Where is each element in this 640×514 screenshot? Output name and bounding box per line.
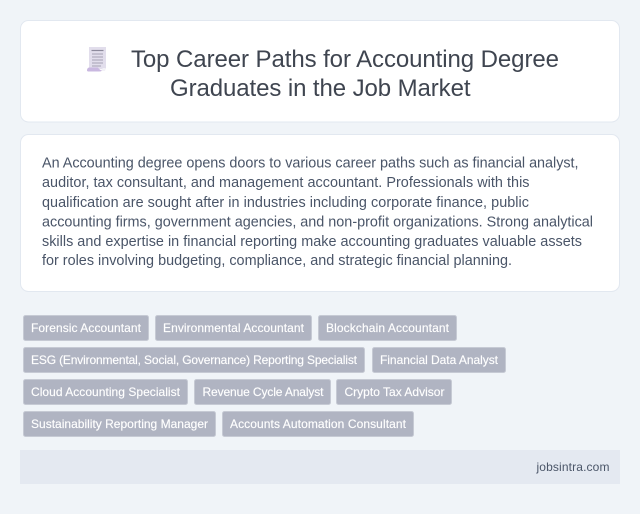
text line 3: qualification are sought after in industries including corporate finance, public [42, 195, 529, 211]
panel: description [20, 134, 620, 292]
panel: header [20, 20, 620, 122]
text line 2: auditor, tax consultant, and management accountant. Professionals with this [42, 175, 530, 191]
tag: ESG Reporting Specialist [24, 348, 364, 372]
tag: ESG Reporting Specialist: ESG (Environmental, Social, Governance) Reporting Specialist [31, 353, 358, 367]
tag: Revenue Cycle Analyst: Revenue Cycle Analyst [202, 385, 324, 399]
tag: Blockchain Accountant [318, 316, 456, 340]
title line 2: Graduates in the Job Market [170, 75, 471, 102]
tag: Environmental Accountant [156, 316, 312, 340]
tag: Sustainability Reporting Manager: Sustainability Reporting Manager [31, 417, 208, 431]
text line 6: for roles involving budgeting, compliance, and strategic financial planning. [42, 253, 512, 269]
icon: ledger scroll [87, 47, 106, 72]
text line 5: skills and expertise in financial reporting make accounting graduates valuable assets [42, 234, 582, 250]
text line 4: accounting firms, government agencies, and non-profit organizations. Strong analytical [42, 214, 593, 230]
tag: Cloud Accounting Specialist [24, 380, 188, 404]
tag: Forensic Accountant: Forensic Accountant [31, 321, 142, 335]
text line 1: An Accounting degree opens doors to various career paths such as financial analyst, [42, 156, 578, 172]
tag: Forensic Accountant [24, 316, 148, 340]
tag: Sustainability Reporting Manager [24, 412, 216, 436]
title line 1: Top Career Paths for Accounting Degree [131, 46, 559, 73]
tag: Crypto Tax Advisor: Crypto Tax Advisor [344, 385, 444, 399]
tag: Environmental Accountant: Environmental Accountant [163, 321, 305, 335]
tag: Accounts Automation Consultant [222, 412, 414, 436]
tag: Accounts Automation Consultant: Accounts Automation Consultant [230, 417, 407, 431]
footer [20, 450, 620, 484]
tag: Blockchain Accountant: Blockchain Accountant [326, 321, 450, 335]
tag: Crypto Tax Advisor [336, 380, 452, 404]
tag: Revenue Cycle Analyst [194, 380, 330, 404]
tag: Financial Data Analyst: Financial Data Analyst [380, 353, 499, 367]
footer source: jobsintra.com [536, 460, 610, 474]
tag: Financial Data Analyst [372, 348, 506, 372]
tag: Cloud Accounting Specialist: Cloud Accounting Specialist [31, 385, 181, 399]
